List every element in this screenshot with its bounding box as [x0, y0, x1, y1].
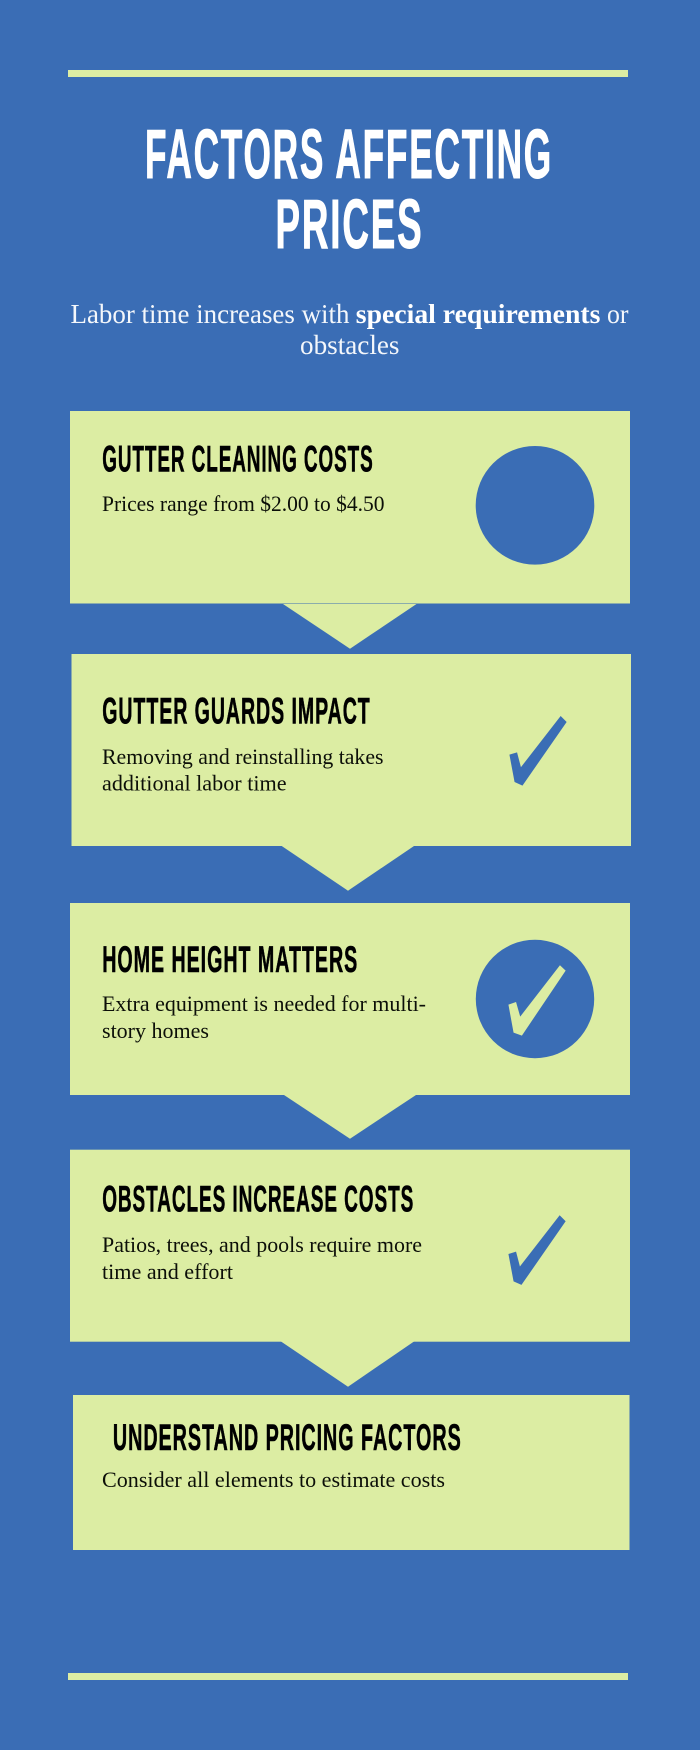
arrow 4 — [281, 1342, 414, 1387]
arrow 2 — [282, 846, 414, 891]
text: extra equipment: story homes — [102, 1018, 209, 1043]
subtitle — [70, 298, 628, 360]
panel: gutter guards impact — [72, 654, 631, 846]
text: price range: Prices range from $2.00 to $4.50 — [102, 491, 384, 516]
text: extra equipment: Extra equipment is needed for multi- — [102, 991, 426, 1016]
icon: circled check mark — [476, 940, 594, 1058]
text: patios, trees, pools: time and effort — [102, 1259, 234, 1284]
text: removing guards: additional labor time — [102, 771, 287, 796]
text: removing guards: Removing and reinstalling takes — [102, 744, 384, 769]
heading: gutter guards impact: GUTTER GUARDS IMPACT — [102, 690, 371, 732]
panel: gutter cleaning costs — [70, 411, 630, 604]
panel: obstacles increase costs — [70, 1150, 630, 1342]
heading: obstacles increase costs: OBSTACLES INCREASE COSTS — [102, 1178, 414, 1220]
icon: check mark — [510, 717, 566, 785]
subtitle: special requirements — [356, 298, 601, 329]
top bar — [68, 70, 628, 77]
text: patios, trees, pools: Patios, trees, and pools require more — [102, 1232, 422, 1257]
text: extra equipment — [102, 991, 426, 1043]
heading: home height matters: HOME HEIGHT MATTERS — [102, 938, 358, 980]
panel: home height matters — [70, 903, 630, 1095]
panel: understand pricing factors — [73, 1395, 630, 1550]
text: patios, trees, pools — [102, 1232, 422, 1284]
subtitle: or — [607, 298, 628, 329]
text: removing guards — [102, 744, 384, 796]
arrow 3 — [284, 1095, 416, 1139]
title — [145, 115, 553, 263]
subtitle: obstacles — [300, 329, 400, 360]
arrow 1 — [283, 604, 416, 649]
icon: blue circle — [476, 446, 594, 565]
title: PRICES — [276, 185, 424, 263]
subtitle: Labor time increases with — [70, 298, 350, 329]
heading: gutter cleaning costs: GUTTER CLEANING COSTS — [102, 438, 374, 480]
bottom bar — [68, 1673, 628, 1680]
icon: check mark — [509, 1216, 565, 1284]
text: consider all elements: Consider all elements to estimate costs — [102, 1467, 445, 1492]
